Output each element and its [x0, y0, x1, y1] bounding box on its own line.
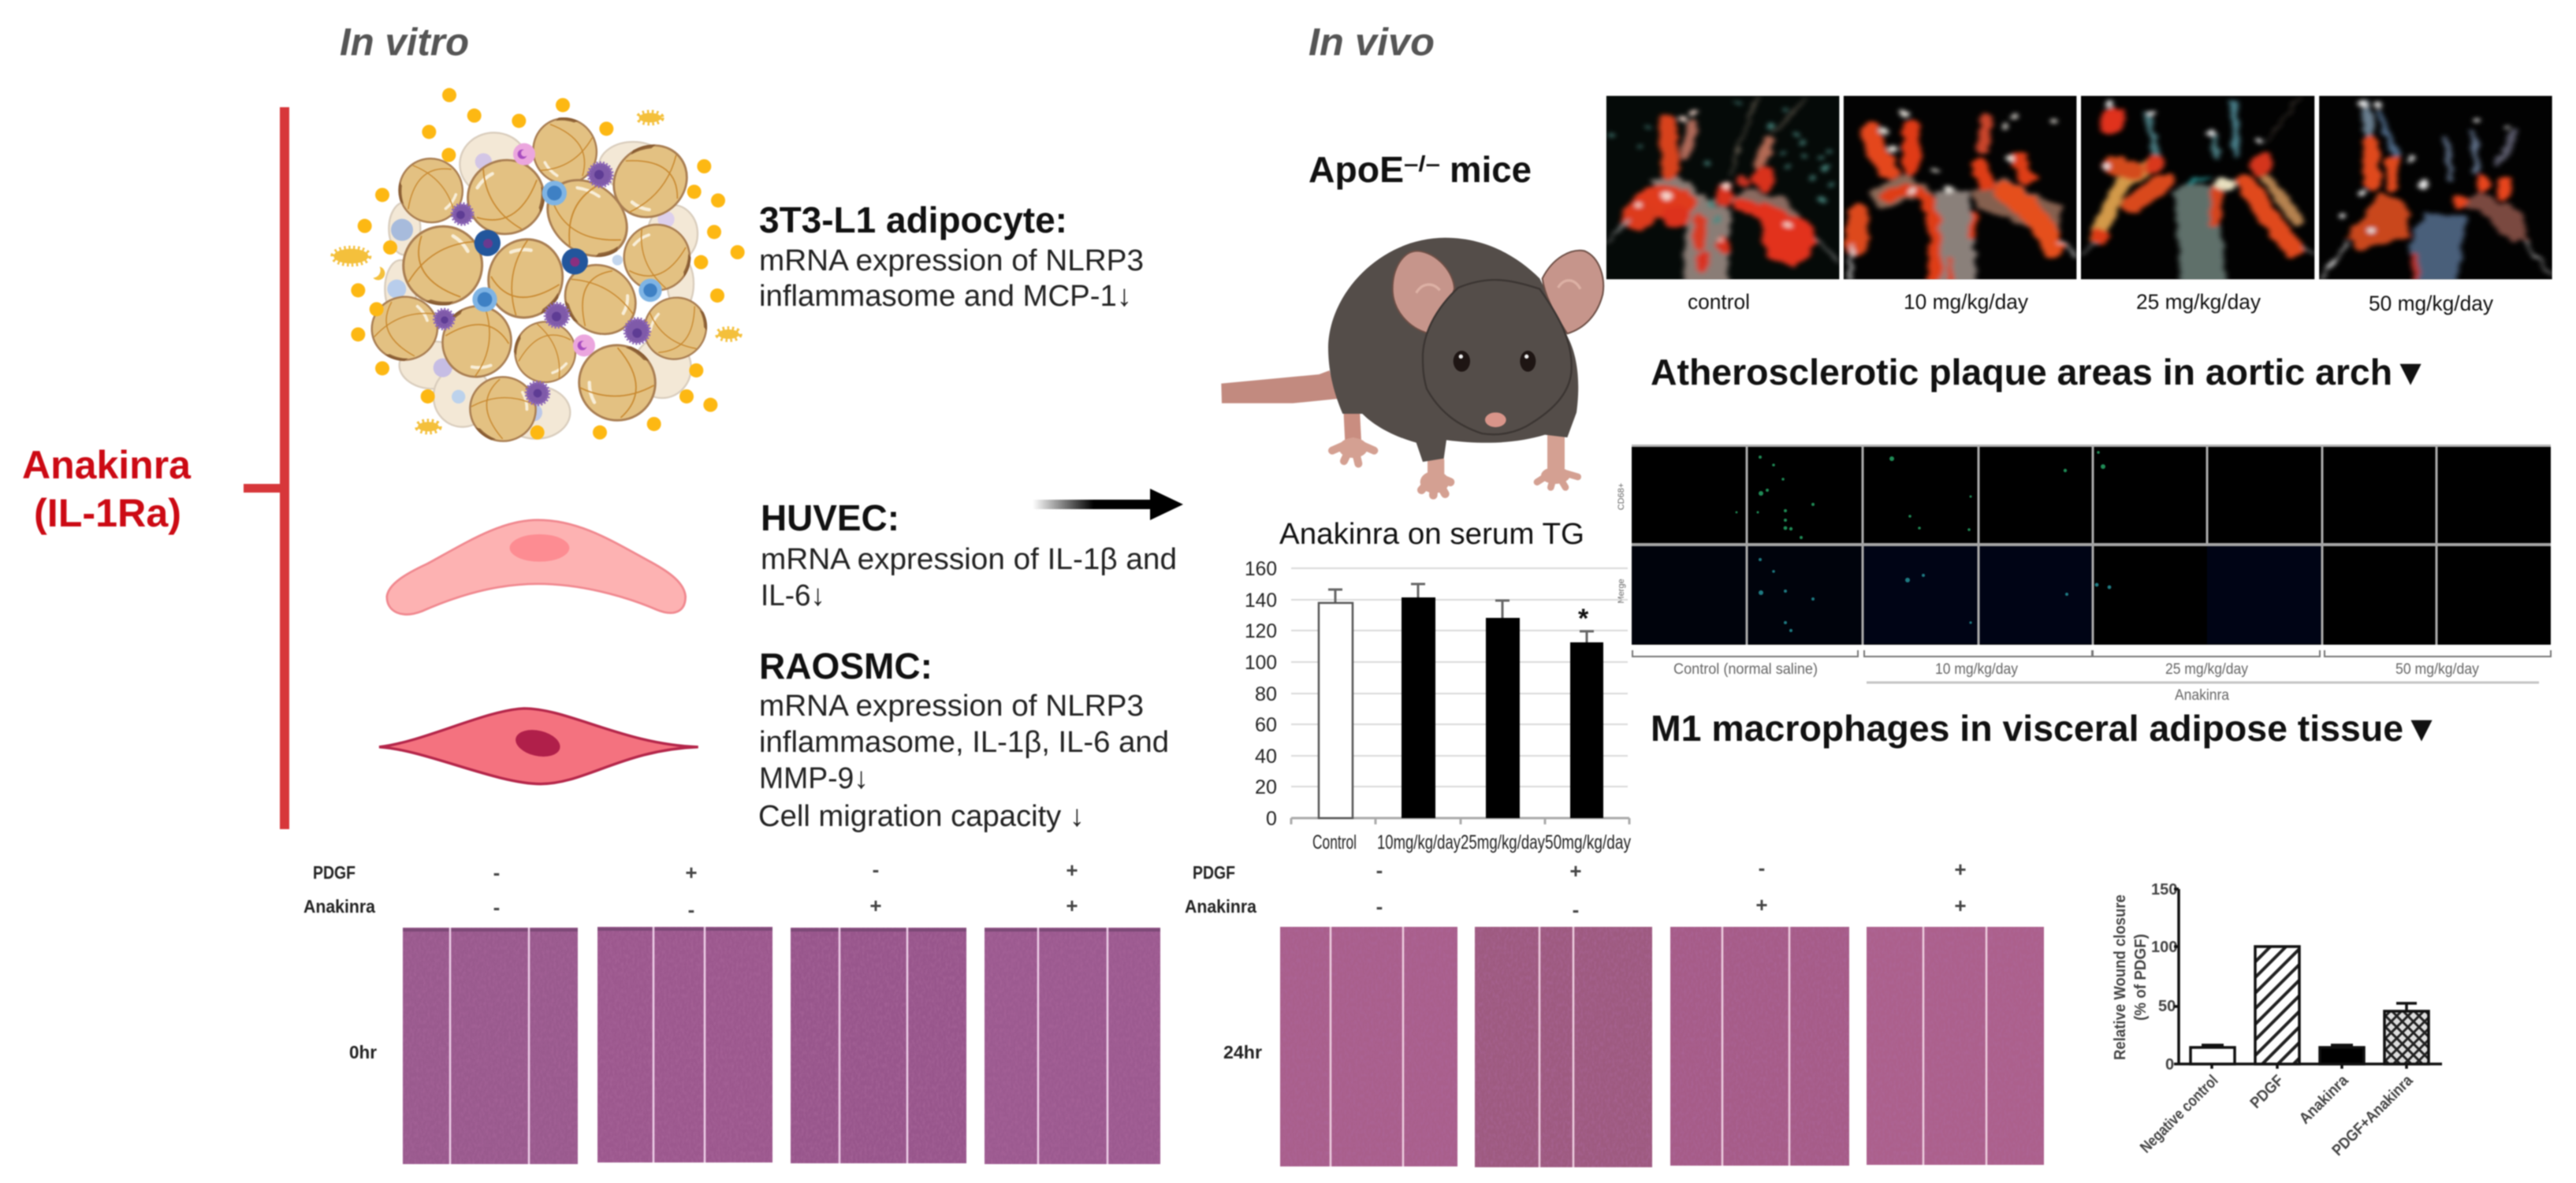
tail [1221, 370, 1338, 404]
labels: 24hr treatment matrix: PDGF [1193, 862, 1235, 883]
y labels: 140 [1245, 590, 1277, 612]
labels: 24hr treatment matrix: - [1759, 856, 1765, 880]
labels: 0hr treatment matrix: + [1066, 894, 1078, 917]
brackets and dose labels: 50 mg/kg/day [2395, 661, 2479, 678]
labels: 24hr treatment matrix: + [1954, 894, 1967, 917]
axis [1291, 818, 1629, 824]
ears [1393, 251, 1454, 333]
labels: aortic arch doses: 25 mg/kg/day [2136, 290, 2261, 314]
x labels: PDGF [2247, 1072, 2288, 1112]
labels: fluorescence rows [1617, 483, 1626, 604]
heading: ApoE-/- mice [1308, 149, 1532, 190]
y-axis title: Relative Wound closure [2112, 895, 2129, 1060]
grid [1291, 568, 1628, 787]
labels: 24hr treatment matrix: - [1376, 895, 1383, 918]
labels: 0hr treatment matrix: - [873, 857, 879, 881]
label: Anakinra (IL-1Ra): Anakinra [22, 443, 192, 487]
heading: ApoE-/- mice: –/– [1404, 151, 1440, 176]
panel: 50 mg aorta [2319, 96, 2552, 286]
bars [2191, 947, 2429, 1064]
y ticks [2151, 881, 2177, 1073]
text block: HUVEC: mRNA expression of IL-1β and [761, 543, 1177, 576]
aortic arch photos [1606, 96, 2552, 286]
text block: 3T3-L1 adipocyte: mRNA expression of NLRP3 [759, 244, 1144, 277]
labels: 24hr treatment matrix: + [1954, 857, 1967, 881]
eyes [1454, 351, 1536, 372]
axes [2174, 889, 2442, 1069]
wound images: 24hr [1280, 927, 2044, 1167]
y labels: 160 [1245, 558, 1277, 580]
error bars [2202, 1003, 2417, 1045]
y labels: 0 [1266, 808, 1277, 830]
brackets and dose labels: 25 mg/kg/day [2165, 661, 2248, 678]
purple macrophages [434, 163, 650, 404]
significance marker: * [1578, 604, 1589, 634]
text block: 3T3-L1 adipocyte [759, 199, 1144, 313]
y ticks: 150 [2151, 881, 2177, 898]
y labels: 20 [1255, 776, 1277, 798]
head [1423, 280, 1572, 434]
bars [1319, 597, 1603, 818]
x labels: Negative control [2137, 1072, 2222, 1156]
panel: 25 mg aorta [2081, 96, 2314, 286]
y labels: 40 [1255, 746, 1277, 768]
y ticks: 50 [2158, 998, 2176, 1015]
section label: In vivo: In vivo [1308, 21, 1435, 64]
brackets and dose labels [1632, 650, 2551, 704]
x labels: Anakinra [2296, 1071, 2352, 1128]
labels: 0hr treatment matrix: Anakinra [303, 896, 375, 917]
chart: Anakinra on serum TG [1245, 518, 1631, 854]
text block: RAOSMC: inflammasome, IL-1β, IL-6 and [759, 726, 1169, 759]
label: Anakinra (IL-1Ra): (IL-1Ra) [34, 491, 181, 535]
labels: 24hr treatment matrix: + [1755, 893, 1768, 917]
wound images: 0hr [403, 927, 1160, 1164]
panel: control aorta [1606, 96, 1839, 286]
text block: RAOSMC: RAOSMC: [759, 645, 932, 686]
y ticks: 0 [2165, 1056, 2174, 1073]
label: Anakinra (IL-1Ra) [22, 443, 192, 535]
merged row tint [1632, 545, 2322, 644]
merged blue signal [1759, 558, 2111, 632]
text block: RAOSMC: Cell migration capacity ↓ [758, 800, 1085, 833]
arrow: in vitro to in vivo [1033, 489, 1183, 520]
labels: 0hr treatment matrix [303, 857, 1078, 1062]
text block: RAOSMC: mRNA expression of NLRP3 [759, 690, 1144, 723]
heading: Atherosclerotic plaque areas: Atherosclerotic plaque areas in aortic arch▼ [1651, 352, 2429, 392]
labels: fluorescence rows: CD68+ [1617, 483, 1626, 510]
text block: HUVEC: IL-6↓ [761, 579, 825, 612]
labels: aortic arch doses: 10 mg/kg/day [1904, 290, 2028, 314]
bracket: red connector [244, 107, 289, 829]
x labels: 10mg/kg/day [1377, 831, 1461, 854]
x labels: Control [1312, 831, 1357, 854]
chart title: Anakinra on serum TG [1279, 518, 1584, 551]
x labels: 50mg/kg/day [1545, 831, 1631, 854]
text block: 3T3-L1 adipocyte: inflammasome and MCP-1↓ [759, 280, 1132, 313]
labels: 0hr treatment matrix: + [1066, 858, 1078, 882]
y labels [1245, 558, 1277, 830]
chart: relative wound closure [2112, 881, 2442, 1159]
labels: 24hr treatment matrix [1185, 856, 1967, 1062]
text block: HUVEC: HUVEC: [761, 497, 899, 538]
y-axis title [2112, 895, 2150, 1060]
heading: ApoE-/- mice: mice [1450, 149, 1532, 190]
labels: 24hr treatment matrix: + [1569, 859, 1582, 883]
labels: aortic arch doses: control [1688, 290, 1750, 314]
icon: adipocyte cluster [333, 88, 745, 447]
y ticks: 100 [2151, 939, 2177, 956]
fluorescence microscopy panel [1632, 445, 2551, 645]
x labels [1312, 831, 1631, 854]
text block: RAOSMC [758, 645, 1169, 833]
yellow debris [333, 113, 739, 431]
icon: HUVEC endothelial cell [387, 520, 686, 615]
crescent [373, 266, 385, 280]
text block: 3T3-L1 adipocyte: 3T3-L1 adipocyte: [759, 199, 1067, 240]
panel: 10 mg aorta [1844, 96, 2076, 286]
blue immune cells [472, 180, 662, 312]
pale background cells [385, 132, 698, 439]
text block: HUVEC [761, 497, 1177, 612]
y-axis title: (% of PDGF) [2132, 934, 2150, 1021]
error bars [1328, 584, 1594, 643]
text block: RAOSMC: MMP-9↓ [759, 762, 869, 795]
nose [1485, 412, 1506, 427]
labels: 0hr treatment matrix: 0hr [349, 1042, 377, 1062]
limbs [1332, 415, 1578, 495]
labels: 0hr treatment matrix: + [869, 894, 882, 917]
brackets and dose labels: Anakinra [2175, 687, 2229, 704]
y labels: 100 [1245, 652, 1277, 674]
brackets and dose labels: Control (normal saline) [1673, 661, 1818, 678]
pink cells [513, 143, 595, 356]
labels: aortic arch doses [1688, 290, 2493, 315]
y labels: 60 [1255, 714, 1277, 736]
labels: fluorescence rows: Merge [1617, 578, 1626, 604]
yellow particles [351, 88, 745, 440]
green CD68 signal [1736, 451, 2105, 539]
adipocytes [367, 109, 720, 447]
body [1328, 238, 1578, 462]
heading: M1 macrophages: M1 macrophages in visceral adipose tissue▼ [1651, 708, 2440, 749]
labels: aortic arch doses: 50 mg/kg/day [2369, 292, 2493, 315]
x labels [2137, 1071, 2417, 1159]
x labels: PDGF+Anakinra [2329, 1071, 2417, 1159]
icon: mouse [1221, 238, 1603, 495]
brackets and dose labels: 10 mg/kg/day [1935, 661, 2018, 678]
heading: ApoE-/- mice: ApoE [1308, 149, 1404, 190]
labels: 24hr treatment matrix: Anakinra [1185, 896, 1256, 917]
labels: 0hr treatment matrix: PDGF [313, 862, 356, 883]
labels: 0hr treatment matrix: - [688, 898, 694, 921]
labels: 0hr treatment matrix: - [493, 895, 500, 919]
labels: 24hr treatment matrix: - [1573, 898, 1579, 921]
labels: 24hr treatment matrix: - [1376, 858, 1383, 882]
y labels: 80 [1255, 683, 1277, 705]
icon: RAOSMC smooth muscle cell [379, 709, 698, 784]
x labels: 25mg/kg/day [1461, 831, 1545, 854]
faded inner cells [387, 153, 675, 422]
labels: 0hr treatment matrix: - [493, 861, 500, 884]
labels: 24hr treatment matrix: 24hr [1223, 1042, 1262, 1062]
section label: In vitro: In vitro [340, 21, 469, 64]
y labels: 120 [1245, 620, 1277, 642]
labels: 0hr treatment matrix: + [685, 861, 698, 884]
